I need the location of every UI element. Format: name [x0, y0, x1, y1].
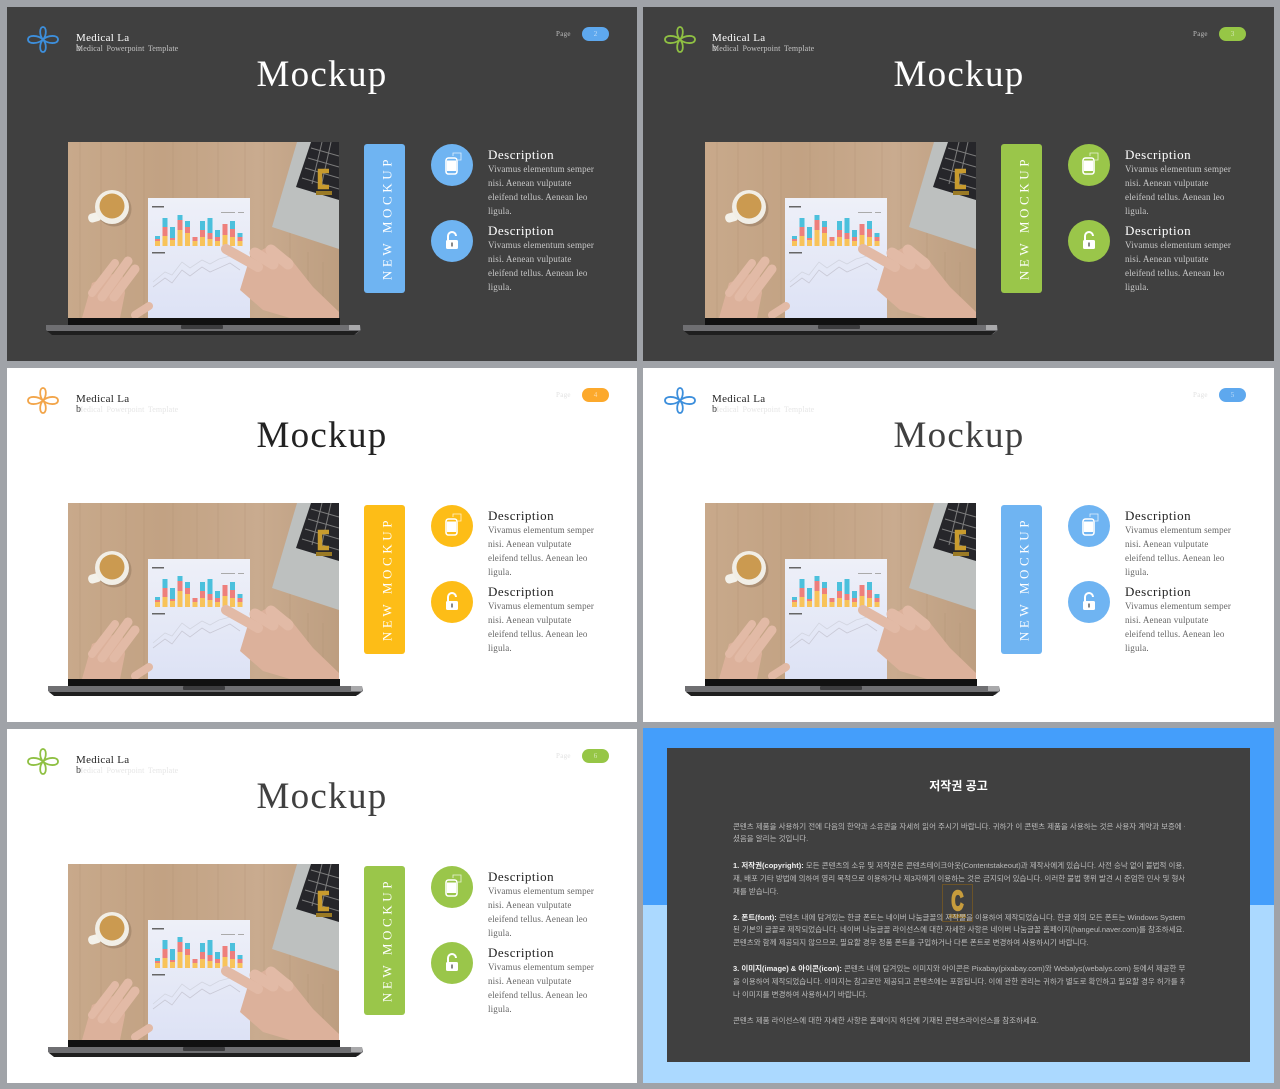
description one: ligula.	[488, 928, 512, 938]
notice item 2	[733, 913, 1185, 947]
description one: eleifend tellus. Aenean leo	[488, 553, 588, 563]
description two: Vivamus elementum semper	[488, 240, 594, 250]
laptop mockup with photo	[48, 864, 363, 1057]
description one: Vivamus elementum semper	[488, 886, 594, 896]
icon: lock	[1068, 581, 1110, 623]
brand name: Medical La	[712, 393, 765, 405]
notice item 2: 콘텐츠와 함께 제공되지 않으므로, 필요할 경우 정품 폰트를 구입하거나 다른 폰트로 변경하여 사용하시기 바랍니다.	[733, 938, 1089, 947]
description two: eleifend tellus. Aenean leo	[1125, 268, 1225, 278]
description two: Vivamus elementum semper	[1125, 240, 1231, 250]
slide: light orange	[6, 368, 637, 722]
description one: ligula.	[1125, 206, 1149, 216]
vertical band: NEW MOCKUP	[380, 517, 394, 641]
description one: Vivamus elementum semper	[488, 164, 594, 174]
watermark logo: C	[951, 885, 964, 916]
description two	[1125, 584, 1231, 653]
icon: phone	[431, 144, 473, 186]
description one: eleifend tellus. Aenean leo	[488, 914, 588, 924]
description two: nisi. Aenean vulputate	[488, 976, 572, 986]
description two	[488, 584, 594, 653]
notice item 1	[733, 861, 1185, 896]
description two: ligula.	[488, 282, 512, 292]
title: Mockup	[256, 415, 388, 456]
page badge: 4	[594, 391, 597, 399]
notice intro: 셨음을 알리는 것입니다.	[733, 834, 808, 843]
description one: nisi. Aenean vulputate	[1125, 539, 1209, 549]
vertical band	[364, 866, 405, 1015]
laptop mockup with photo	[683, 142, 998, 335]
notice intro	[733, 822, 1185, 843]
description two: Vivamus elementum semper	[488, 962, 594, 972]
description one: Vivamus elementum semper	[1125, 525, 1231, 535]
title: Mockup	[893, 54, 1025, 95]
description one	[488, 147, 594, 216]
brand subtitle: b	[76, 43, 81, 54]
laptop mockup with photo	[48, 503, 363, 696]
laptop mockup with photo	[685, 503, 1000, 696]
description two: Description	[488, 223, 554, 238]
icon: phone	[1068, 505, 1110, 547]
brand name: Medical La	[76, 393, 129, 405]
icon: phone	[431, 505, 473, 547]
description one	[488, 869, 594, 938]
description two	[488, 223, 594, 292]
logo: green flower	[664, 26, 696, 53]
title: Mockup	[893, 415, 1025, 456]
brand subtitle: Medical Powerpoint Template	[76, 766, 178, 775]
brand subtitle: Medical Powerpoint Template	[76, 44, 178, 53]
laptop mockup with photo	[46, 142, 361, 335]
brand subtitle: b	[76, 404, 81, 415]
vertical band	[1001, 144, 1042, 293]
description two: eleifend tellus. Aenean leo	[1125, 629, 1225, 639]
description one: nisi. Aenean vulputate	[488, 900, 572, 910]
logo: green flower	[27, 748, 59, 775]
description two: eleifend tellus. Aenean leo	[488, 268, 588, 278]
watermark logo	[942, 884, 973, 922]
description two: ligula.	[1125, 282, 1149, 292]
description two: eleifend tellus. Aenean leo	[488, 990, 588, 1000]
description one: nisi. Aenean vulputate	[1125, 178, 1209, 188]
description one: nisi. Aenean vulputate	[488, 178, 572, 188]
slide: light green	[6, 729, 637, 1083]
icon: lock	[431, 220, 473, 262]
description one: nisi. Aenean vulputate	[488, 539, 572, 549]
page badge: Page	[556, 30, 571, 38]
description two	[488, 945, 594, 1014]
description one	[1125, 508, 1231, 577]
description two: Vivamus elementum semper	[1125, 601, 1231, 611]
description one: Vivamus elementum semper	[488, 525, 594, 535]
page badge: 6	[594, 752, 597, 760]
description one: ligula.	[488, 206, 512, 216]
logo: blue flower	[27, 26, 59, 53]
panel: notice	[667, 748, 1250, 1062]
icon: lock	[431, 581, 473, 623]
notice item 3: 나 이미지를 변경하여 사용하시기 바랍니다.	[733, 990, 868, 999]
description one: Vivamus elementum semper	[1125, 164, 1231, 174]
description one: Description	[488, 508, 554, 523]
vertical band	[364, 505, 405, 654]
description two	[1125, 223, 1231, 292]
notice item 3	[733, 964, 1185, 999]
brand subtitle: b	[712, 404, 717, 415]
logo: blue flower	[664, 387, 696, 414]
description two: ligula.	[1125, 643, 1149, 653]
page badge: 5	[1231, 391, 1234, 399]
page badge: Page	[556, 391, 571, 399]
logo: orange flower	[27, 387, 59, 414]
notice footer: 콘텐츠 제품 라이선스에 대한 자세한 사항은 홈페이지 하단에 기재된 콘텐츠라이선스를 참조하세요.	[733, 1016, 1039, 1025]
brand subtitle: b	[712, 43, 717, 54]
description one: ligula.	[1125, 567, 1149, 577]
page badge	[556, 388, 609, 402]
notice heading: 저작권 공고	[929, 779, 988, 793]
icon: lock	[431, 942, 473, 984]
brand subtitle: Medical Powerpoint Template	[76, 405, 178, 414]
page badge: 3	[1231, 30, 1234, 38]
brand subtitle: b	[76, 765, 81, 776]
slide: copyright notice	[643, 728, 1274, 1083]
description two: Description	[1125, 584, 1191, 599]
description two: Vivamus elementum semper	[488, 601, 594, 611]
description one: Description	[1125, 147, 1191, 162]
icon: phone	[1068, 144, 1110, 186]
vertical band: NEW MOCKUP	[1016, 517, 1032, 641]
brand name: Medical La	[76, 754, 129, 766]
brand name: Medical La	[712, 32, 765, 44]
description one: ligula.	[488, 567, 512, 577]
title: Mockup	[256, 776, 388, 817]
vertical band: NEW MOCKUP	[380, 156, 394, 280]
description one	[1125, 147, 1231, 216]
page badge	[1193, 27, 1246, 41]
vertical band	[364, 144, 405, 293]
description two: eleifend tellus. Aenean leo	[488, 629, 588, 639]
slide: dark blue	[6, 7, 637, 361]
brand name: Medical La	[76, 32, 129, 44]
page badge: Page	[1193, 391, 1208, 399]
description two: Description	[488, 584, 554, 599]
description two: nisi. Aenean vulputate	[1125, 254, 1209, 264]
vertical band: NEW MOCKUP	[380, 878, 394, 1002]
title: Mockup	[256, 54, 388, 95]
page badge	[556, 27, 609, 41]
slide: light blue	[643, 368, 1274, 722]
description one: Description	[488, 869, 554, 884]
description two: ligula.	[488, 1004, 512, 1014]
description one: eleifend tellus. Aenean leo	[488, 192, 588, 202]
slide: dark green	[643, 7, 1274, 361]
description two: ligula.	[488, 643, 512, 653]
description two: nisi. Aenean vulputate	[488, 254, 572, 264]
page badge: Page	[556, 752, 571, 760]
description one: eleifend tellus. Aenean leo	[1125, 192, 1225, 202]
description one	[488, 508, 594, 577]
vertical band	[1001, 505, 1042, 654]
icon: phone	[431, 866, 473, 908]
notice item 1: 재를 받습니다.	[733, 887, 779, 896]
description two: nisi. Aenean vulputate	[488, 615, 572, 625]
description one: Description	[1125, 508, 1191, 523]
page badge	[556, 749, 609, 763]
brand subtitle: Medical Powerpoint Template	[712, 44, 814, 53]
description two: nisi. Aenean vulputate	[1125, 615, 1209, 625]
vertical band: NEW MOCKUP	[1016, 156, 1032, 280]
page badge: 2	[594, 30, 597, 38]
description two: Description	[488, 945, 554, 960]
description one: Description	[488, 147, 554, 162]
icon: lock	[1068, 220, 1110, 262]
page badge: Page	[1193, 30, 1208, 38]
description one: eleifend tellus. Aenean leo	[1125, 553, 1225, 563]
page badge	[1193, 388, 1246, 402]
description two: Description	[1125, 223, 1191, 238]
brand subtitle: Medical Powerpoint Template	[712, 405, 814, 414]
